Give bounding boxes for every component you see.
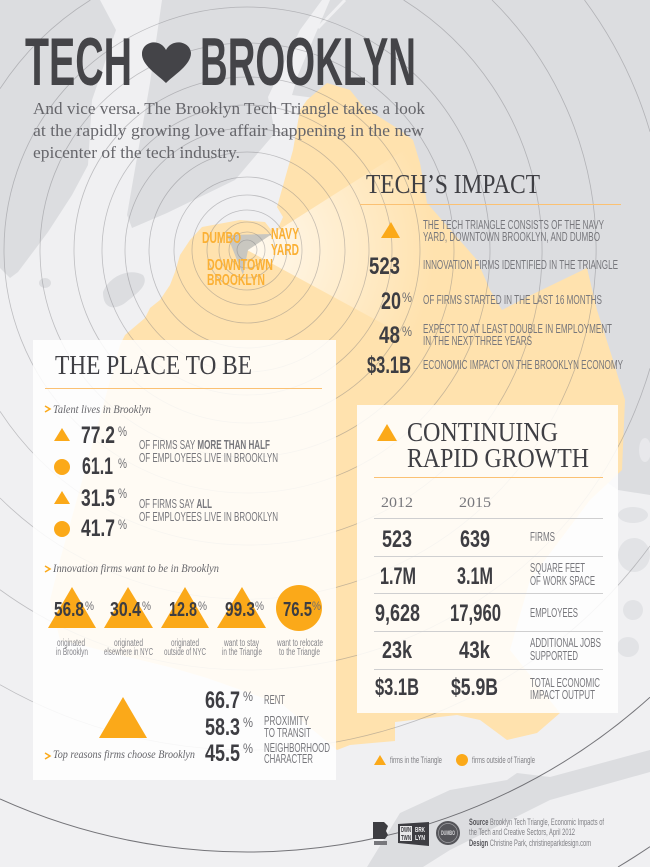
section: innovation firms: %	[255, 599, 264, 613]
table rows: 523	[382, 526, 412, 553]
section: top reasons: %	[243, 714, 253, 730]
table rows: FIRMS	[530, 529, 555, 544]
section: innovation firms: originated	[114, 638, 143, 649]
section: talent lives in brooklyn: OF EMPLOYEES LIVE IN BROOKLYN	[139, 509, 278, 524]
panel: tech's impact: IN THE NEXT THREE YEARS	[423, 333, 532, 348]
map labels	[202, 226, 299, 289]
section: innovation firms: 12.8	[169, 599, 197, 621]
logo: dwn twn brk lyn	[398, 822, 429, 846]
heading: continuing rapid growth: RAPID GROWTH	[407, 443, 589, 473]
section: innovation firms: want to stay	[223, 638, 259, 649]
logo: dwn twn brk lyn: DWN	[401, 827, 411, 834]
section: innovation firms: in the Triangle	[222, 647, 262, 658]
section: talent lives in brooklyn	[45, 402, 278, 542]
table rows: 1.7M	[380, 563, 416, 590]
map labels: DUMBO	[202, 230, 241, 247]
section: talent lives in brooklyn: 31.5	[81, 485, 115, 512]
section: talent lives in brooklyn: %	[118, 516, 127, 532]
table rows: SUPPORTED	[530, 648, 578, 663]
section: top reasons: 58.3	[205, 714, 240, 741]
legend	[374, 754, 535, 766]
credits: the Tech and Creative Sectors, April 2012	[469, 827, 575, 838]
icon: heart	[142, 42, 191, 83]
section: talent lives in brooklyn: OF FIRMS SAY MORE THAN HALF	[139, 437, 270, 452]
section: innovation firms: 99.3	[225, 599, 255, 621]
panel: tech's impact: 48	[379, 322, 400, 349]
section: talent lives in brooklyn: 77.2	[81, 422, 115, 449]
section: top reasons: %	[243, 688, 253, 704]
map labels: DOWNTOWN	[207, 257, 273, 274]
panel: tech's impact: TECH’S IMPACT	[366, 169, 540, 199]
title	[25, 24, 416, 100]
icon: triangle	[381, 222, 400, 238]
panel: continuing rapid growth: 2015	[459, 495, 491, 511]
table rows: EMPLOYEES	[530, 605, 578, 620]
table rows: 9,628	[375, 600, 420, 627]
intro text: epicenter of the tech industry.	[33, 143, 240, 162]
panel: tech's impact: 20	[381, 288, 401, 315]
table rows: $3.1B	[375, 674, 419, 701]
section: innovation firms: %	[198, 599, 207, 613]
section: top reasons: %	[243, 740, 253, 756]
map labels: YARD	[271, 242, 299, 259]
section: innovation firms: %	[142, 599, 151, 613]
icon: triangle	[377, 424, 397, 441]
section: talent lives in brooklyn: 41.7	[81, 515, 115, 542]
section: talent lives in brooklyn: %	[118, 455, 127, 471]
intro text	[33, 99, 425, 162]
section: innovation firms	[45, 561, 323, 658]
panel: continuing rapid growth	[357, 405, 618, 713]
section: innovation firms: %	[85, 599, 94, 613]
logo: brooklyn b	[373, 822, 388, 845]
section: top reasons: 66.7	[205, 687, 240, 714]
section: innovation firms: outside of NYC	[164, 647, 206, 658]
panel: tech's impact: 523	[369, 253, 400, 280]
logo: dwn twn brk lyn: TWN	[401, 835, 411, 842]
section: top reasons: PROXIMITY	[264, 713, 309, 728]
table rows: SQUARE FEET	[530, 560, 585, 575]
intro text: at the rapidly growing love affair happening in the new	[33, 121, 425, 140]
logo: dwn twn brk lyn: BRK	[415, 827, 425, 834]
credits	[469, 817, 604, 849]
table rows: OF WORK SPACE	[530, 573, 595, 588]
panel: continuing rapid growth: 2012	[381, 495, 413, 511]
intro text: And vice versa. The Brooklyn Tech Triangle takes a look	[33, 99, 425, 118]
section: innovation firms: want to relocate	[276, 638, 323, 649]
panel: tech's impact: %	[402, 323, 412, 339]
section: top reasons: RENT	[264, 692, 285, 707]
logos	[373, 821, 460, 846]
section: innovation firms: Innovation firms want to be in Brooklyn	[52, 561, 219, 575]
panel: tech's impact	[360, 169, 623, 379]
section: top reasons: NEIGHBORHOOD	[264, 740, 330, 755]
section: innovation firms: originated	[57, 638, 85, 649]
map labels: NAVY	[271, 226, 299, 243]
panel: tech's impact: %	[402, 289, 412, 305]
section: talent lives in brooklyn: OF FIRMS SAY ALL	[139, 496, 212, 511]
section: talent lives in brooklyn: OF EMPLOYEES LIVE IN BROOKLYN	[139, 450, 278, 465]
table rows: 43k	[459, 637, 491, 664]
legend: firms in the Triangle	[390, 755, 442, 766]
section: talent lives in brooklyn: 61.1	[82, 453, 113, 480]
table rows: TOTAL ECONOMIC	[530, 675, 600, 690]
section: top reasons	[45, 687, 330, 767]
logo: dwn twn brk lyn: LYN	[415, 835, 425, 842]
heading: continuing rapid growth	[407, 417, 589, 473]
section: top reasons: Top reasons firms choose Brooklyn	[53, 747, 195, 761]
title: BROOKLYN	[200, 24, 416, 100]
section: talent lives in brooklyn: %	[118, 485, 127, 501]
section: talent lives in brooklyn: Talent lives in Brooklyn	[53, 402, 151, 416]
section: innovation firms: originated	[171, 638, 199, 649]
section: innovation firms: elsewhere in NYC	[104, 647, 153, 658]
table rows: 639	[460, 526, 490, 553]
section: innovation firms: 30.4	[110, 599, 142, 621]
table rows: 17,960	[450, 600, 501, 627]
section: innovation firms: 76.5	[283, 599, 312, 621]
section: innovation firms: in Brooklyn	[56, 647, 88, 658]
section: innovation firms: 56.8	[54, 599, 84, 621]
section: talent lives in brooklyn: %	[118, 423, 127, 439]
legend: firms outside of Triangle	[472, 755, 535, 766]
table rows: $5.9B	[451, 674, 498, 701]
logo: dumbo: DUMBO	[441, 830, 455, 837]
table rows: 23k	[382, 637, 412, 664]
table rows: 3.1M	[457, 563, 493, 590]
panel: the place to be	[33, 340, 336, 780]
map labels: BROOKLYN	[207, 272, 265, 289]
title: TECH	[25, 24, 132, 100]
table rows: IMPACT OUTPUT	[530, 687, 595, 702]
section: top reasons: CHARACTER	[264, 751, 313, 766]
table rows	[375, 526, 601, 702]
panel: tech's impact: $3.1B	[367, 352, 411, 379]
table rows: ADDITIONAL JOBS	[530, 635, 601, 650]
section: top reasons: TO TRANSIT	[264, 725, 311, 740]
section: innovation firms: %	[312, 599, 321, 613]
heading: the place to be: THE PLACE TO BE	[55, 350, 252, 380]
heading: continuing rapid growth: CONTINUING	[407, 417, 558, 447]
section: innovation firms: to the Triangle	[279, 647, 320, 658]
section: top reasons: 45.5	[205, 740, 240, 767]
